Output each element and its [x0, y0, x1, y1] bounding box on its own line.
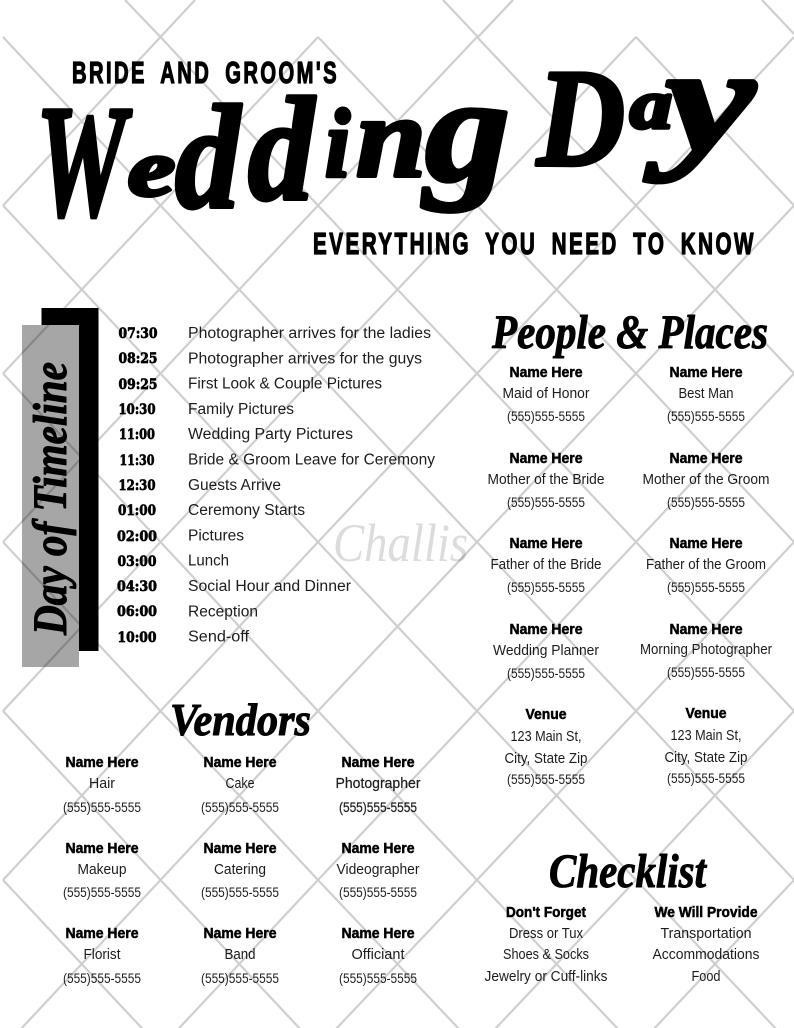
contact: mother of the groom: (555)555-5555 — [667, 494, 745, 510]
vendor: hair: (555)555-5555 — [63, 799, 141, 815]
row 11:00 — [119, 426, 353, 443]
contact: maid of honor: (555)555-5555 — [507, 408, 585, 424]
heading: checklist: Checklist — [549, 845, 707, 898]
contact: father of the bride: Name Here — [510, 536, 582, 552]
contact: venue one: Venue — [526, 707, 566, 723]
timeline schedule — [117, 325, 435, 646]
panel: vendors — [63, 694, 421, 986]
panel: day of timeline banner — [22, 308, 98, 667]
contact: venue two: Venue — [686, 706, 726, 722]
vendor: makeup: Name Here — [66, 841, 138, 857]
contact: father of the bride: (555)555-5555 — [507, 579, 585, 595]
list: we will provide: We Will Provide — [654, 905, 758, 921]
contact: venue two: City, State Zip — [664, 750, 748, 766]
title: wedding day: g — [422, 47, 510, 213]
contact: venue one: (555)555-5555 — [507, 771, 585, 787]
row 01:00: Ceremony Starts — [188, 502, 305, 519]
row 11:30: Bride & Groom Leave for Ceremony — [188, 452, 435, 468]
vendor: photographer: Photographer — [336, 776, 421, 792]
row 11:30: 11:30 — [120, 453, 155, 469]
contact: father of the groom — [646, 536, 766, 595]
contact: venue one: 123 Main St, — [510, 729, 582, 745]
list: we will provide: Transportation — [660, 926, 752, 942]
vendor: catering — [201, 841, 279, 900]
row 01:00: 01:00 — [118, 503, 156, 519]
row 03:00 — [118, 553, 229, 570]
contact: father of the groom: Name Here — [670, 536, 742, 552]
row 04:30: Social Hour and Dinner — [188, 578, 351, 595]
contact: mother of the bride — [488, 451, 604, 510]
row 11:00: Wedding Party Pictures — [188, 426, 353, 443]
vendor: makeup: (555)555-5555 — [63, 884, 141, 900]
contact: maid of honor: Maid of Honor — [502, 386, 590, 402]
row 09:25: First Look & Couple Pictures — [188, 376, 382, 393]
row 10:30 — [118, 401, 294, 418]
contact: best man: Name Here — [670, 365, 742, 381]
vendor: videographer: (555)555-5555 — [339, 884, 417, 900]
list: don't forget: Shoes & Socks — [503, 947, 589, 963]
vendor: cake — [201, 755, 279, 815]
contact: venue one: City, State Zip — [504, 751, 588, 767]
vendor: makeup: Makeup — [78, 862, 126, 878]
row 07:30: Photographer arrives for the ladies — [188, 325, 431, 342]
title: wedding day: W — [36, 72, 132, 250]
row 04:30: 04:30 — [117, 579, 157, 595]
vendor: hair: Name Here — [66, 755, 138, 771]
row 09:25: 09:25 — [118, 377, 158, 393]
contact: mother of the groom: Mother of the Groom — [642, 472, 770, 488]
row 10:00: 10:00 — [118, 630, 157, 646]
watermark: challis: Challis — [333, 513, 468, 573]
title: wedding day: n — [356, 74, 426, 201]
row 01:00 — [118, 502, 305, 519]
row 06:00 — [117, 603, 258, 620]
vendor: hair: Hair — [89, 776, 115, 792]
contact: wedding planner — [493, 622, 599, 681]
contact: wedding planner: Wedding Planner — [493, 643, 599, 659]
vendor: cake: Cake — [226, 776, 254, 792]
contact: mother of the groom — [642, 451, 770, 510]
row 08:25: 08:25 — [118, 351, 158, 367]
vendor: florist: Name Here — [66, 926, 138, 942]
vendor: officiant — [339, 926, 417, 986]
contact: wedding planner: (555)555-5555 — [507, 665, 585, 681]
vendor: band — [201, 926, 279, 986]
row 11:00: 11:00 — [119, 427, 155, 443]
panel: checklist — [484, 845, 760, 985]
contact: venue two: (555)555-5555 — [667, 770, 745, 786]
contact: mother of the bride: (555)555-5555 — [507, 494, 585, 510]
vendor: band: Name Here — [204, 926, 276, 942]
row 02:00: 02:00 — [117, 529, 157, 545]
contact: best man — [667, 365, 745, 424]
vendor: officiant: (555)555-5555 — [339, 970, 417, 986]
contact: wedding planner: Name Here — [510, 622, 582, 638]
contact: venue one — [504, 707, 588, 787]
list: don't forget — [484, 905, 608, 985]
title: wedding day: y — [643, 17, 757, 183]
title: wedding day: i — [325, 90, 350, 198]
banner heading: Day of Timeline — [24, 362, 77, 636]
contact: morning photographer: Name Here — [670, 622, 742, 638]
vendor: officiant: Officiant — [352, 947, 404, 963]
vendor: videographer: Videographer — [336, 862, 420, 878]
row 10:00: Send-off — [188, 629, 250, 646]
contact: venue two: 123 Main St, — [670, 728, 742, 744]
vendor: catering: (555)555-5555 — [201, 884, 279, 900]
contact: father of the groom: Father of the Groom — [646, 557, 766, 573]
vendor: florist — [63, 926, 141, 986]
row 04:30 — [117, 578, 351, 595]
heading: vendors: Vendors — [170, 694, 311, 745]
list: we will provide: Accommodations — [652, 947, 760, 963]
list: don't forget: Jewelry or Cuff-links — [484, 969, 608, 985]
row 10:30: 10:30 — [118, 402, 156, 418]
vendor: photographer: Name Here — [342, 755, 414, 771]
contact: father of the bride: Father of the Bride — [490, 557, 602, 573]
contact: morning photographer — [640, 622, 772, 680]
contact: father of the bride — [490, 536, 602, 595]
vendor: band: Band — [224, 947, 256, 963]
vendor: cake: Name Here — [204, 755, 276, 771]
header: bride and groom's: BRIDE AND GROOM'S — [72, 55, 339, 90]
contact: mother of the bride: Name Here — [510, 451, 582, 467]
contact: morning photographer: Morning Photographer — [640, 642, 772, 658]
panel: people and places — [488, 306, 772, 787]
row 10:00 — [118, 629, 250, 646]
row 12:30: 12:30 — [118, 478, 156, 494]
row 06:00: 06:00 — [117, 604, 157, 620]
vendor: florist: (555)555-5555 — [63, 970, 141, 986]
list: don't forget: Don't Forget — [506, 905, 586, 921]
row 02:00: Pictures — [188, 527, 244, 544]
vendor: florist: Florist — [84, 947, 120, 963]
black backing bar — [42, 308, 98, 651]
row 12:30 — [118, 477, 281, 494]
vendor: makeup — [63, 841, 141, 900]
vendor: videographer: Name Here — [342, 841, 414, 857]
row 10:30: Family Pictures — [188, 401, 294, 418]
vendor: band: (555)555-5555 — [201, 970, 279, 986]
contact: maid of honor — [502, 365, 590, 424]
row 03:00: Lunch — [188, 553, 229, 570]
contact: father of the groom: (555)555-5555 — [667, 579, 745, 595]
contact: mother of the bride: Mother of the Bride — [488, 472, 604, 488]
row 12:30: Guests Arrive — [188, 477, 281, 494]
vendor: videographer — [336, 841, 420, 900]
vendor: photographer: (555)555-5555 — [339, 799, 417, 815]
grey front bar — [22, 325, 79, 667]
row 07:30: 07:30 — [118, 326, 158, 342]
row 06:00: Reception — [188, 603, 258, 620]
vendor: photographer — [336, 755, 421, 815]
title: wedding day: e — [128, 125, 175, 213]
vendor: cake: (555)555-5555 — [201, 799, 279, 815]
vendor: catering: Name Here — [204, 841, 276, 857]
row 02:00 — [117, 527, 244, 545]
title: wedding day — [36, 17, 757, 250]
title: wedding day: d — [175, 76, 242, 240]
list: don't forget: Dress or Tux — [509, 926, 584, 942]
title: wedding day: d — [248, 68, 316, 232]
contact: maid of honor: Name Here — [510, 365, 582, 381]
vendor: catering: Catering — [214, 862, 266, 878]
title: wedding day: a — [630, 67, 672, 144]
row 08:25: Photographer arrives for the guys — [188, 350, 422, 367]
contact: mother of the groom: Name Here — [670, 451, 742, 467]
vendor: officiant: Name Here — [342, 926, 414, 942]
contact: best man: (555)555-5555 — [667, 408, 745, 424]
contact: best man: Best Man — [678, 386, 734, 402]
list: we will provide — [652, 905, 760, 985]
contact: morning photographer: (555)555-5555 — [667, 664, 745, 680]
contact: venue two — [664, 706, 748, 786]
vendor: hair — [63, 755, 141, 815]
list: we will provide: Food — [692, 969, 720, 985]
title: wedding day: D — [535, 41, 625, 196]
row 03:00: 03:00 — [118, 554, 157, 570]
